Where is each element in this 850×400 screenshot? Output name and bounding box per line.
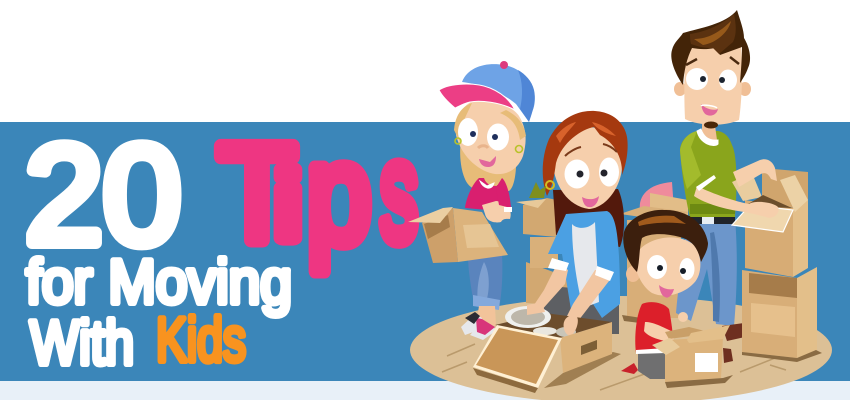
box interior <box>495 313 612 338</box>
mother earring <box>546 181 554 189</box>
boy eyes <box>647 255 667 279</box>
title: 20: 20 <box>25 116 181 273</box>
mother shirt <box>572 222 599 308</box>
open box with plates <box>473 302 621 393</box>
title: Tips: T <box>218 117 296 269</box>
floor rug <box>410 296 832 400</box>
father <box>671 10 751 363</box>
father legs <box>676 218 737 326</box>
boy hair <box>623 210 708 272</box>
father collar <box>697 129 718 145</box>
mother <box>529 111 628 334</box>
boy ear <box>626 266 640 282</box>
title: for Moving: for Moving <box>26 248 292 317</box>
boy shoe <box>621 363 638 374</box>
father belt <box>687 216 735 224</box>
father shirt <box>680 131 737 217</box>
title: Tips: i <box>275 153 301 259</box>
boy head <box>635 237 700 296</box>
mother eyes <box>564 160 590 188</box>
mother mouth <box>582 196 599 207</box>
father hair <box>671 10 750 85</box>
title: Tips: s <box>380 113 418 270</box>
boy pants <box>638 351 668 379</box>
boy shirt <box>635 302 673 353</box>
father neck <box>702 118 717 141</box>
blue banner <box>0 122 850 381</box>
boxes behind boy <box>620 182 688 325</box>
mother head <box>553 127 622 209</box>
girl legs <box>468 255 502 304</box>
girl earrings <box>516 146 522 152</box>
plant <box>529 182 546 198</box>
title <box>25 113 418 378</box>
father head <box>684 44 742 125</box>
boy box <box>652 325 733 388</box>
father sleeve cuff <box>696 175 716 191</box>
girl collar <box>480 181 494 188</box>
girl <box>408 61 535 340</box>
title: Kids: Kids <box>156 306 246 375</box>
box lid <box>473 325 562 388</box>
box shadow <box>544 352 621 388</box>
boxes behind mother <box>516 198 570 306</box>
mother hand on box <box>564 315 578 336</box>
mother arms <box>532 262 613 325</box>
father raised arm <box>733 159 777 187</box>
mother hair <box>543 111 628 196</box>
father eyes <box>686 68 708 90</box>
plate <box>505 306 551 328</box>
mother hair back <box>553 189 624 247</box>
father goatee <box>704 122 718 128</box>
mother jacket <box>548 211 620 318</box>
father lower arm <box>694 186 779 218</box>
girl mouth <box>479 156 496 167</box>
box side <box>560 322 612 373</box>
pale lower strip <box>0 381 850 400</box>
girl hair back <box>460 140 516 191</box>
boy arm <box>644 322 675 342</box>
father ears <box>674 82 686 96</box>
box label <box>695 353 718 372</box>
girl shirt <box>465 178 511 212</box>
lower right box <box>742 267 822 362</box>
father mouth <box>701 104 718 116</box>
girl head <box>456 101 526 174</box>
girl cap <box>462 64 535 122</box>
girl box <box>422 208 458 263</box>
boy <box>621 210 708 379</box>
mother pants <box>533 287 619 334</box>
title: Tips: p <box>307 115 371 272</box>
girl shoes <box>461 314 482 335</box>
title: With: With <box>30 309 134 378</box>
girl hand <box>482 201 511 222</box>
girl eyes <box>458 118 478 146</box>
boy mouth <box>659 285 674 298</box>
upper right box <box>694 159 808 277</box>
